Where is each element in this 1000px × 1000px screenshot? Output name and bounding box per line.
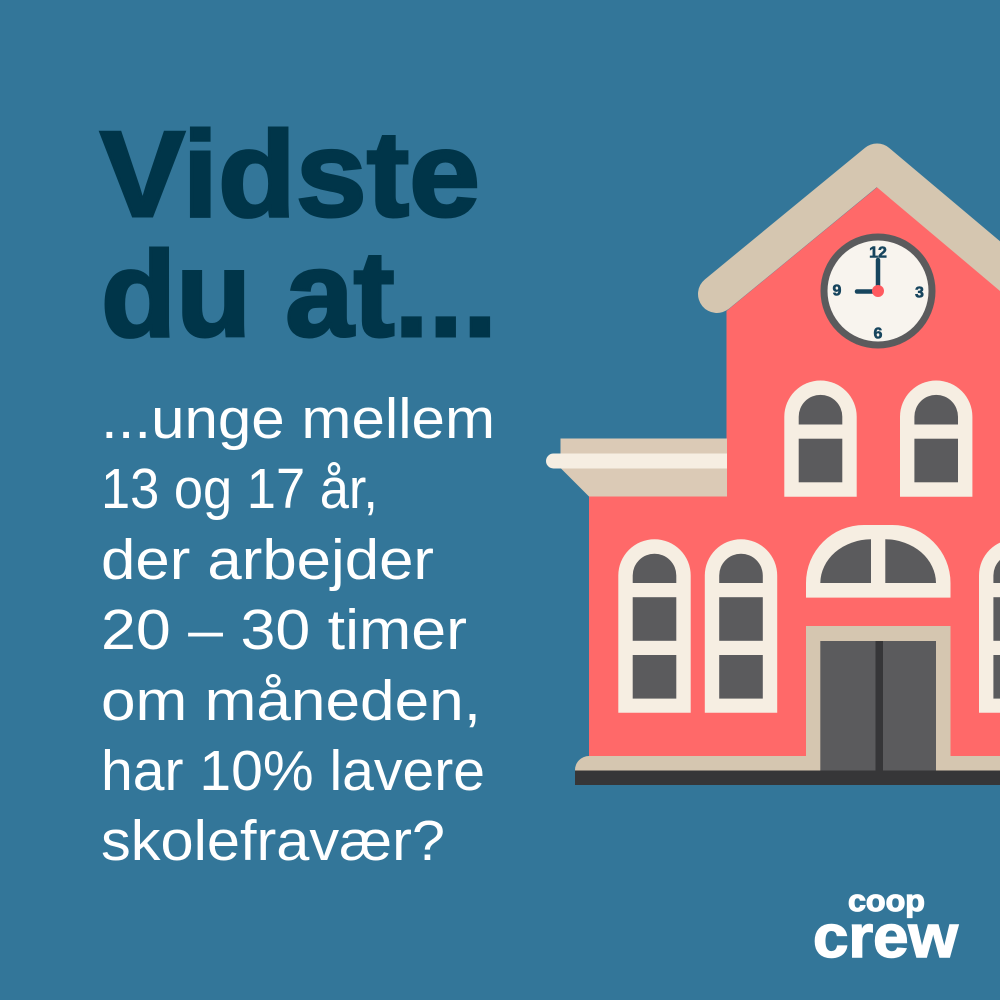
clock: 12 (869, 244, 887, 262)
clock: 9 (833, 282, 842, 300)
door (820, 641, 936, 771)
clock (820, 234, 936, 348)
body text (101, 387, 495, 873)
side eave (546, 438, 727, 496)
arched window over door (806, 525, 950, 598)
building wall (589, 187, 1000, 771)
upper window right (900, 380, 972, 497)
base step (575, 626, 1000, 771)
title (100, 106, 497, 362)
roof (717, 162, 1000, 304)
body text: skolefravær? (101, 809, 445, 873)
logo: coop crew: crew (813, 903, 958, 970)
body text: om måneden, (101, 669, 481, 733)
body text: 13 og 17 år, (101, 457, 378, 521)
lower window 2 (705, 539, 777, 713)
title: du at... (101, 226, 497, 362)
body text: 20 – 30 timer (101, 598, 467, 662)
body text: der arbejder (101, 528, 434, 592)
clock: 6 (874, 326, 883, 342)
title: Vidste (100, 106, 480, 242)
clock: 3 (915, 284, 924, 302)
lower window 3 (979, 539, 1000, 713)
lower window 1 (618, 539, 691, 713)
illustration: school building (546, 162, 1000, 785)
body text: ...unge mellem (101, 387, 495, 451)
body text: har 10% lavere (101, 739, 485, 803)
ground line (575, 770, 1000, 785)
logo: coop crew: coop (848, 883, 925, 918)
upper window left (784, 380, 857, 497)
